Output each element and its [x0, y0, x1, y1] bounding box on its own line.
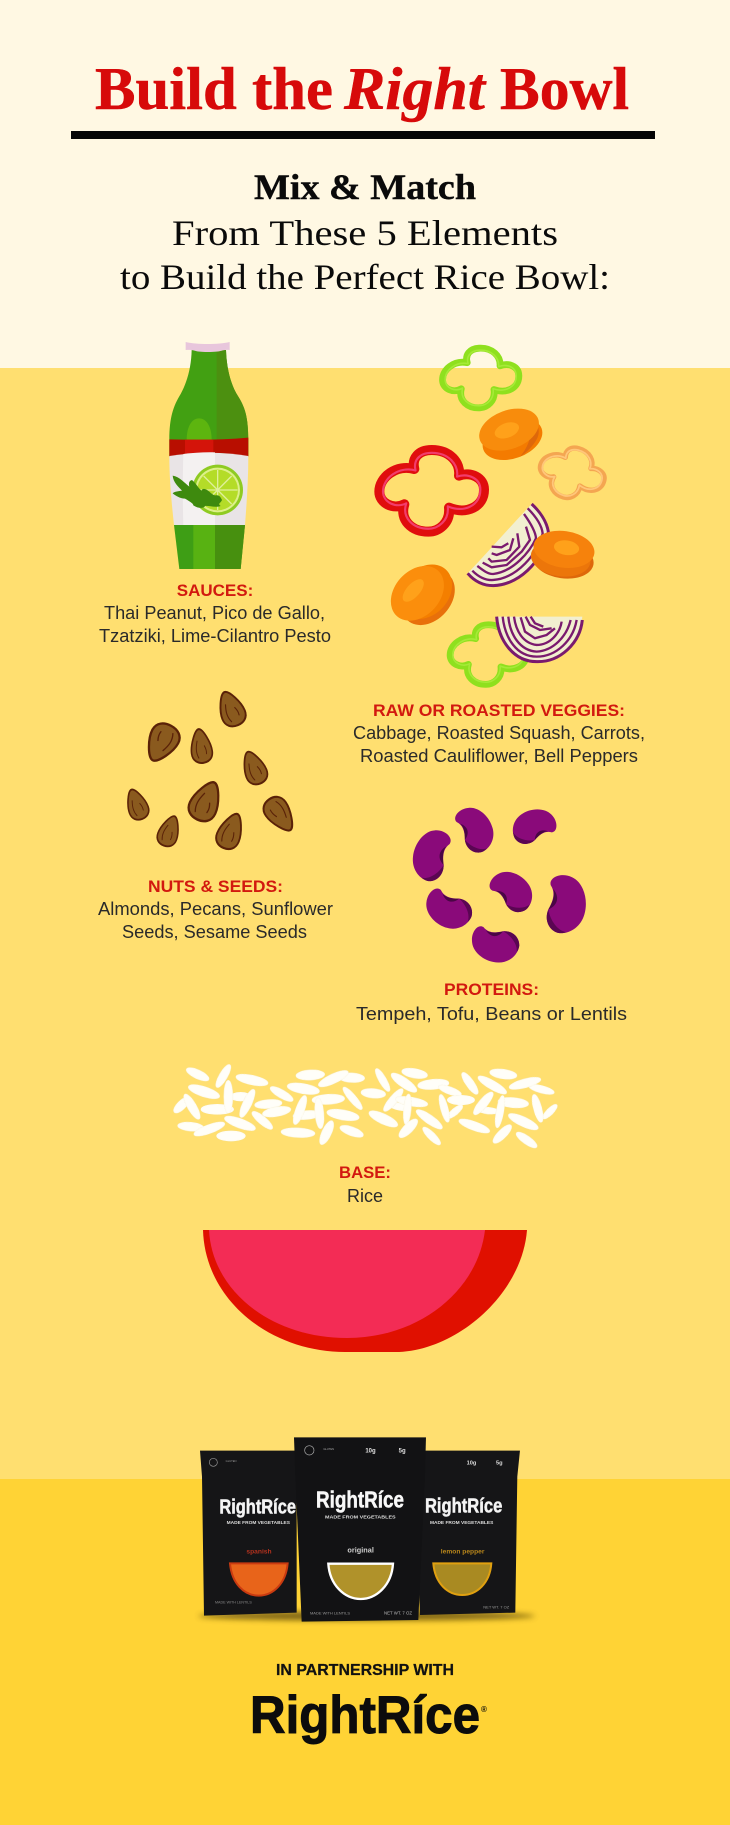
- bag: spanish: spanish: [246, 1549, 272, 1556]
- label: sauces: Tzatziki, Lime-Cilantro Pesto: [99, 626, 331, 646]
- bag: lemon pepper: MADE FROM VEGETABLES: [430, 1520, 493, 1525]
- label: sauces: Thai Peanut, Pico de Gallo,: [104, 603, 325, 623]
- label: veggies: Cabbage, Roasted Squash, Carrots,: [353, 723, 645, 743]
- bag: lemon pepper: 5g: [496, 1460, 503, 1466]
- subtitle: From These 5 Elements: [172, 213, 558, 253]
- green pepper ring, top: [441, 346, 520, 410]
- background: golden footer band: [0, 1479, 730, 1825]
- icon: sauce bottle: [169, 342, 248, 569]
- background: yellow ingredients band: [0, 368, 730, 1479]
- lime slice: [192, 465, 243, 515]
- label: nuts and seeds: Seeds, Sesame Seeds: [122, 922, 307, 942]
- label: base: Rice: [347, 1186, 383, 1206]
- label: nuts and seeds: Almonds, Pecans, Sunflower: [98, 899, 333, 919]
- label: nuts and seeds: NUTS & SEEDS:: [148, 877, 283, 896]
- carrot slice, right: [528, 527, 598, 582]
- title rule: [71, 131, 655, 139]
- subtitle: to Build the Perfect Rice Bowl:: [120, 257, 610, 297]
- red pepper ring: [379, 450, 484, 532]
- bag: lemon pepper: NET WT. 7 OZ: [483, 1604, 510, 1609]
- label: proteins: Tempeh, Tofu, Beans or Lentils: [356, 1004, 627, 1024]
- illustration: rice grains: [172, 1063, 559, 1150]
- bag: spanish: RightRíce: [219, 1495, 296, 1518]
- carrot slice, upper: [473, 401, 548, 468]
- label: veggies: RAW OR ROASTED VEGGIES:: [373, 701, 625, 720]
- label: base: [339, 1163, 391, 1206]
- bag: lemon pepper: lemon pepper: [441, 1548, 485, 1555]
- RightRice logo: ®: [481, 1705, 487, 1714]
- bag: lemon pepper: RightRíce: [425, 1495, 502, 1518]
- label: nuts and seeds: [98, 877, 333, 942]
- arugula leaf: [173, 476, 222, 508]
- product photo: three RightRice bags: [198, 1437, 535, 1622]
- illustration: nuts and seeds: [122, 688, 300, 852]
- bag: original: MADE WITH LENTILS: [310, 1610, 350, 1615]
- bag: original: MADE FROM VEGETABLES: [325, 1515, 396, 1520]
- RightRice logo: RightRíce: [250, 1686, 480, 1745]
- label: proteins: [356, 980, 627, 1024]
- label: veggies: [353, 701, 645, 766]
- bag: spanish: GLUTEN: [226, 1459, 237, 1463]
- pale orange pepper ring: [534, 440, 610, 506]
- bag: lemon pepper: [413, 1451, 520, 1615]
- bag: spanish: MADE FROM VEGETABLES: [227, 1520, 290, 1525]
- bag: original: RightRíce: [316, 1486, 404, 1512]
- title: Bowl: [500, 56, 629, 122]
- ground shadow: [198, 1611, 535, 1621]
- bag: original: original: [347, 1546, 374, 1555]
- bag: spanish: MADE WITH LENTILS: [215, 1600, 252, 1604]
- bag: original: NET WT. 7 OZ: [384, 1610, 412, 1615]
- title: Right: [343, 56, 487, 122]
- illustration: raw and roasted veggies: [379, 346, 610, 684]
- partnership text: IN PARTNERSHIP WITH: [276, 1662, 454, 1679]
- label: proteins: PROTEINS:: [444, 980, 539, 999]
- subtitle: Mix & Match: [254, 167, 476, 207]
- bag: original: 10g: [365, 1449, 376, 1455]
- green pepper ring, bottom: [450, 625, 527, 684]
- label: veggies: Roasted Cauliflower, Bell Peppers: [360, 746, 638, 766]
- illustration: red bowl: [203, 1230, 527, 1352]
- cabbage wedge: [468, 504, 548, 586]
- label: sauces: [99, 581, 331, 646]
- title: [95, 56, 629, 122]
- label: base: BASE:: [339, 1163, 391, 1182]
- bag: original: GLUTEN: [323, 1447, 334, 1451]
- cabbage half: [497, 617, 582, 662]
- bag: lemon pepper: 10g: [467, 1460, 477, 1466]
- carrot slice, lower left: [380, 551, 467, 639]
- subtitle: [120, 167, 610, 297]
- label: sauces: SAUCES:: [177, 581, 253, 600]
- illustration: proteins beans: [413, 799, 596, 965]
- bag: original: 5g: [399, 1449, 406, 1455]
- background: cream header band: [0, 0, 730, 368]
- bag: original: [294, 1437, 426, 1622]
- title: Build the: [95, 56, 333, 122]
- bag: spanish: [200, 1451, 297, 1616]
